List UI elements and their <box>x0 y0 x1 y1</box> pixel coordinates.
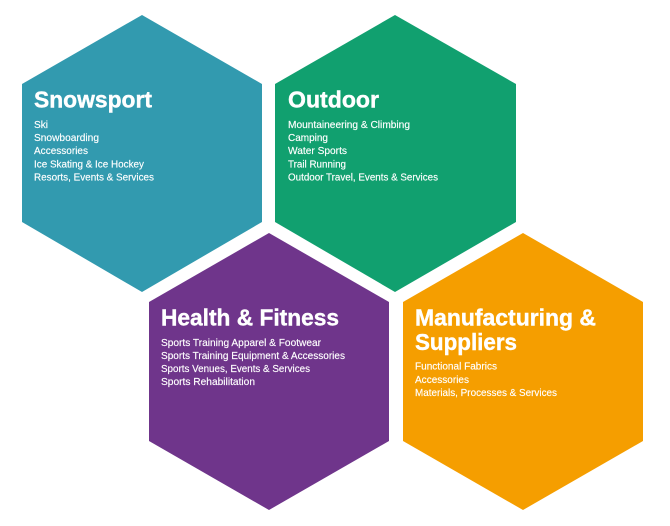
panel: Health & Fitness <box>149 233 389 510</box>
panel: Manufacturing & Suppliers <box>403 233 643 510</box>
list: Outdoor items: Outdoor Travel, Events & Services <box>288 172 438 184</box>
hexagon: Outdoor <box>275 15 516 292</box>
panel: Outdoor <box>275 15 516 292</box>
list: Health & Fitness items: Sports Training Apparel & Footwear <box>161 337 321 349</box>
list: Snowsport items: Snowboarding <box>34 132 99 144</box>
list: Manufacturing & Suppliers items <box>415 360 557 399</box>
list: Outdoor items: Camping <box>288 132 328 144</box>
heading: Health & Fitness: Health & Fitness <box>161 304 339 330</box>
hexagon: Health & Fitness <box>149 233 389 510</box>
list: Snowsport items <box>34 119 154 184</box>
list: Manufacturing & Suppliers items: Functional Fabrics <box>415 360 497 372</box>
heading: Manufacturing & Suppliers: Manufacturing & <box>415 304 596 330</box>
hexagon: Snowsport <box>22 15 262 292</box>
list: Health & Fitness items: Sports Training Equipment & Accessories <box>161 350 345 362</box>
list: Snowsport items: Ice Skating & Ice Hockey <box>34 158 145 170</box>
hexagon: Manufacturing & Suppliers <box>403 233 643 510</box>
list: Health & Fitness items: Sports Rehabilitation <box>161 376 255 388</box>
heading: Manufacturing & Suppliers <box>415 304 596 355</box>
list: Outdoor items: Mountaineering & Climbing <box>288 119 410 131</box>
heading: Snowsport: Snowsport <box>34 86 152 112</box>
list: Snowsport items: Accessories <box>34 145 88 157</box>
list: Outdoor items: Water Sports <box>288 145 347 157</box>
panel: Snowsport <box>22 15 262 292</box>
list: Health & Fitness items: Sports Venues, Events & Services <box>161 363 310 375</box>
list: Outdoor items: Trail Running <box>288 158 346 170</box>
list: Snowsport items: Resorts, Events & Services <box>34 172 154 184</box>
list: Manufacturing & Suppliers items: Materials, Processes & Services <box>415 387 557 399</box>
heading: Manufacturing & Suppliers: Suppliers <box>415 329 517 355</box>
heading: Outdoor: Outdoor <box>288 86 379 112</box>
list: Outdoor items <box>288 119 438 184</box>
list: Manufacturing & Suppliers items: Accessories <box>415 374 469 386</box>
list: Health & Fitness items <box>161 337 345 388</box>
list: Snowsport items: Ski <box>34 119 48 131</box>
